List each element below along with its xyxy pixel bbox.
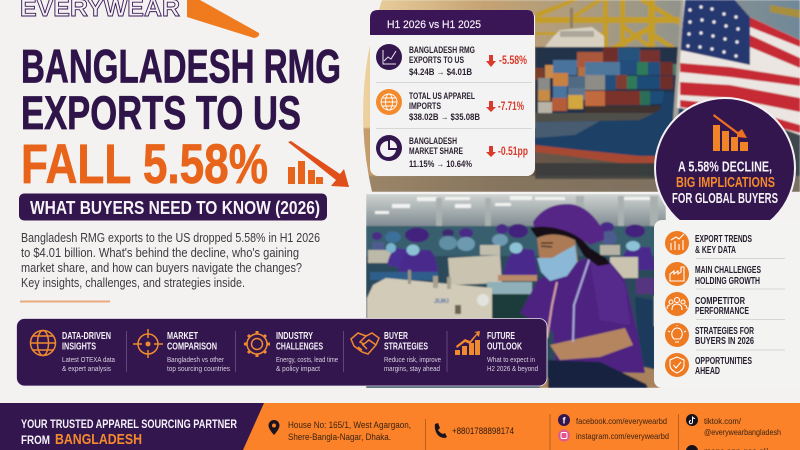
left workers: [370, 228, 438, 280]
feature: market comparison: [133, 329, 230, 373]
logo: Everywear: [20, 0, 259, 38]
stat: market share: MARKET SHARE: [409, 146, 463, 157]
panel: feature strip: [16, 318, 547, 386]
stat: market share: 11.15% → 10.64%: [409, 159, 472, 170]
crane: [534, 0, 680, 48]
feature: industry challenges: & policy impact: [276, 366, 320, 373]
footer address: Shere-Bangla-Nagar, Dhaka.: [288, 432, 391, 442]
feature: buyer strategies: margins, stay ahead: [384, 366, 440, 373]
feature: future outlook: OUTLOOK: [487, 342, 523, 352]
feature: buyer strategies: [351, 331, 441, 373]
right worker: [610, 224, 660, 294]
icon: declining bars: [713, 114, 748, 151]
title: [21, 40, 341, 195]
machine brand: JUKI: [434, 298, 449, 305]
feature: market comparison: MARKET: [167, 331, 198, 342]
topic: opportunities: [665, 353, 752, 377]
topic: opportunities: OPPORTUNITIES: [695, 356, 752, 367]
superstructure: [544, 26, 606, 48]
topic: strategies: BUYERS IN 2026: [695, 336, 754, 347]
topic: competitor performance: [665, 292, 749, 317]
feature: market comparison: top sourcing countries: [167, 366, 230, 373]
stat: RMG exports: EXPORTS TO US: [409, 55, 464, 66]
footer tagline: [21, 417, 237, 448]
feature: buyer strategies: STRATEGIES: [384, 342, 428, 352]
hull: [535, 92, 684, 163]
footer social links: f: [562, 416, 566, 426]
woman: shirt: [520, 257, 645, 373]
feature: buyer strategies: BUYER: [384, 331, 409, 342]
stat: market share: [376, 135, 528, 170]
centre worker: [498, 224, 538, 281]
footer tagline: YOUR TRUSTED APPAREL SOURCING PARTNER: [21, 417, 237, 431]
work table: [487, 282, 532, 294]
feature: data-driven insights: INSIGHTS: [62, 342, 96, 352]
topic: strategies: [665, 323, 755, 347]
panel: topics list: [654, 220, 800, 388]
stat: US apparel imports: IMPORTS: [409, 101, 441, 112]
navy cloth: [548, 360, 648, 388]
footer phone: +8801788898174: [452, 426, 514, 436]
topic: export trends: EXPORT TRENDS: [695, 234, 752, 245]
footer band: [0, 403, 800, 450]
main sewing machine: [367, 278, 492, 320]
topic: strategies: STRATEGIES FOR: [695, 326, 755, 337]
woman: face: [537, 234, 578, 262]
photo: container ship at port with US flag: [350, 0, 800, 192]
topic: opportunities: AHEAD: [695, 366, 720, 377]
feature: future outlook: [455, 331, 538, 373]
footer tagline: BANGLADESH: [55, 431, 142, 448]
footer phone: [435, 423, 514, 438]
footer social links: [558, 414, 781, 450]
panel: H1 2026 vs H1 2025 stats: [370, 10, 535, 176]
feature: data-driven insights: [30, 330, 115, 373]
intro paragraph: to $4.01 billion. What's behind the decline, who's gaining: [21, 245, 299, 260]
topic: main challenges: MAIN CHALLENGES: [695, 265, 761, 276]
topic: main challenges: [665, 262, 761, 287]
stat: US apparel imports: TOTAL US APPAREL: [409, 91, 475, 102]
topic: competitor performance: PERFORMANCE: [695, 306, 749, 317]
subtitle pill: WHAT BUYERS NEED TO KNOW (2026): [30, 198, 320, 218]
footer address: [268, 420, 411, 442]
feature: market comparison: Bangladesh vs other: [167, 357, 225, 364]
woman: mask: [537, 245, 577, 281]
stat: RMG exports: BANGLADESH RMG: [409, 45, 475, 56]
footer social links: tiktok.com/: [704, 416, 742, 426]
intro paragraph: Key insights, challenges, and strategies inside.: [21, 275, 245, 290]
flag pole and flag: [673, 0, 685, 120]
topic: competitor performance: COMPETITOR: [695, 296, 746, 307]
woman: hair: [530, 226, 610, 266]
feature: buyer strategies: Reduce risk, improve: [384, 357, 441, 364]
title: EXPORTS TO US: [21, 86, 301, 139]
topic: export trends: & KEY DATA: [695, 245, 736, 256]
containers: [535, 47, 680, 115]
feature: data-driven insights: & expert analysis: [62, 366, 111, 373]
feature: data-driven insights: Latest OTEXA data: [62, 357, 115, 364]
title: BANGLADESH RMG: [21, 40, 341, 92]
icon: falling bar chart arrow: [288, 141, 349, 187]
title: FALL 5.58%: [21, 132, 268, 195]
feature: industry challenges: [244, 331, 338, 373]
feature: data-driven insights: DATA-DRIVEN: [62, 331, 111, 342]
stat: market share: -0.51pp: [498, 146, 528, 158]
topic: export trends: [665, 231, 752, 256]
panel: H1 2026 vs H1 2025 stats: H1 2026 vs H1 2025: [387, 19, 481, 31]
footer social links: facebook.com/everywearbd: [576, 416, 667, 426]
footer tagline: FROM: [21, 433, 50, 447]
back machines: [368, 250, 398, 263]
far workers: [366, 222, 666, 256]
stat: market share: BANGLADESH: [409, 136, 457, 147]
stat: US apparel imports: -7.71%: [498, 101, 524, 113]
feature: industry challenges: CHALLENGES: [276, 342, 323, 352]
feature: future outlook: FUTURE: [487, 331, 515, 342]
callout circle: big implications: [655, 98, 795, 238]
footer social links: instagram.com/everywearbd: [576, 431, 669, 441]
feature: industry challenges: INDUSTRY: [276, 331, 313, 342]
intro paragraph: [21, 230, 320, 290]
intro paragraph: market share, and how can buyers navigate the changes?: [21, 260, 302, 275]
feature: industry challenges: Energy, costs, lead time: [276, 357, 338, 364]
footer address: House No: 165/1, West Agargaon,: [288, 420, 411, 430]
subtitle pill: [19, 194, 327, 220]
topic: main challenges: HOLDING GROWTH: [695, 276, 760, 287]
feature: future outlook: H2 2026 & beyond: [487, 366, 538, 373]
stat: US apparel imports: $38.02B → $35.08B: [409, 112, 480, 123]
stat: US apparel imports: [376, 89, 524, 123]
stat: RMG exports: $4.24B → $4.01B: [409, 67, 472, 78]
stat: RMG exports: -5.58%: [499, 55, 527, 67]
feature: market comparison: COMPARISON: [167, 342, 217, 352]
chair and table: [636, 298, 654, 368]
photo: garment factory worker at sewing machine: [366, 194, 666, 388]
woman: lanyards: [547, 282, 557, 338]
woman: scarf: [533, 204, 604, 245]
feature: future outlook: What to expect in: [487, 357, 535, 364]
stat: RMG exports: [376, 44, 527, 78]
woman: forearm: [550, 328, 633, 360]
machine behind: [448, 255, 502, 285]
footer social links: @everywearbangladesh: [704, 427, 781, 437]
intro paragraph: Bangladesh RMG exports to the US dropped 5.58% in H1 2026: [21, 230, 320, 245]
